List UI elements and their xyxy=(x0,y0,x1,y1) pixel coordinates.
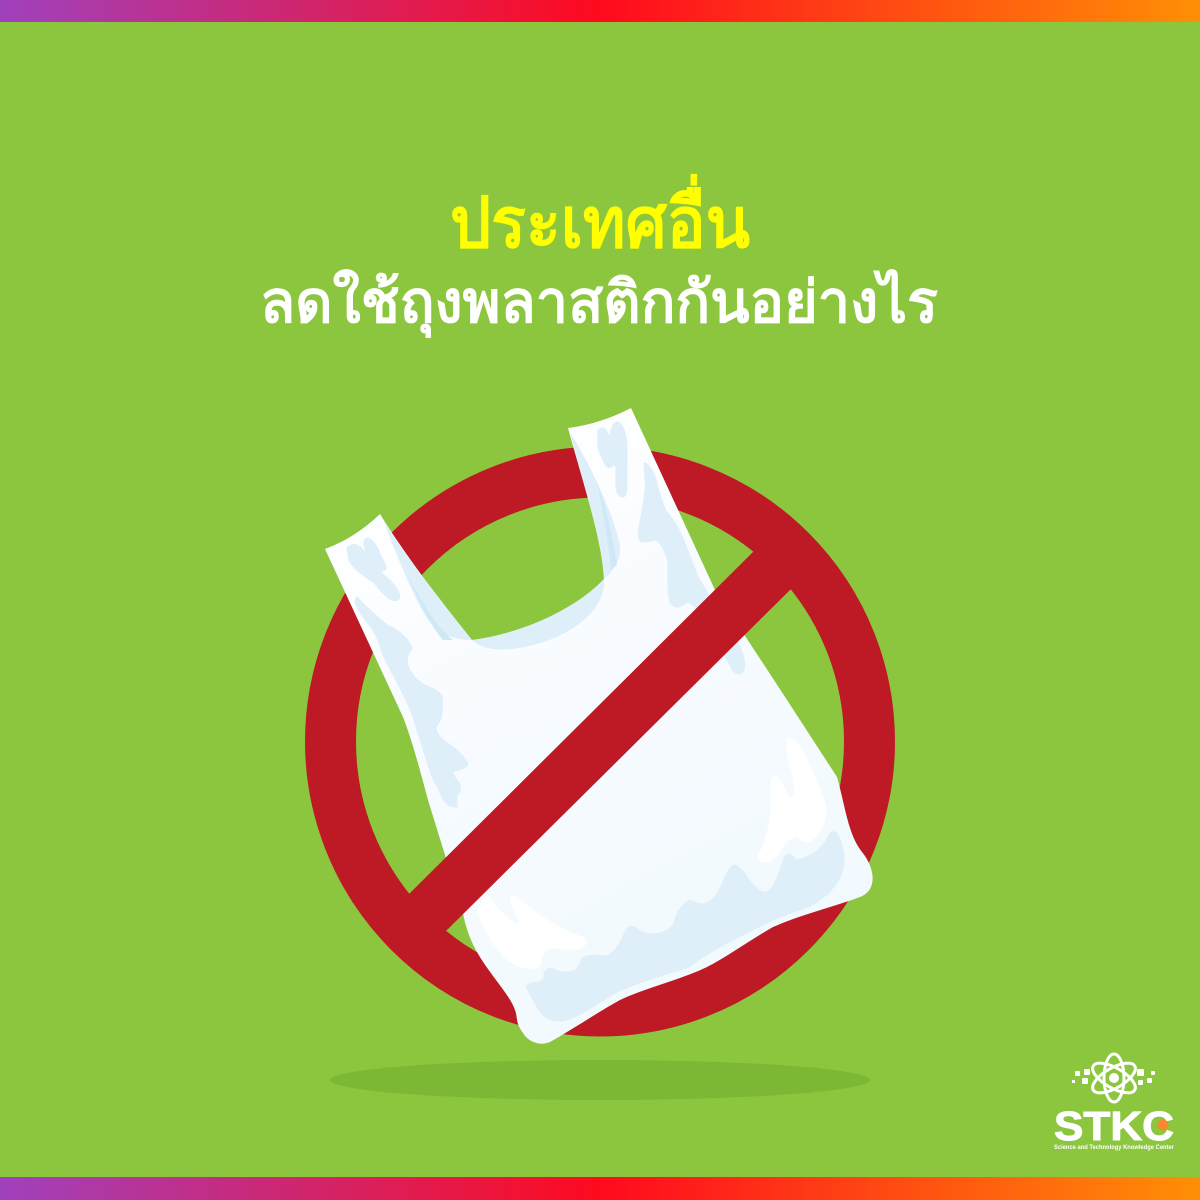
prohibition ring xyxy=(330,472,870,1011)
left handle fold xyxy=(383,520,472,640)
right edge patch xyxy=(639,464,744,673)
prohibition diagonal bar xyxy=(395,530,810,950)
title: ประเทศอื่น xyxy=(450,173,750,262)
ground shadow xyxy=(330,1060,870,1100)
logo tagline: Science and Technology Knowledge Center xyxy=(1054,1145,1175,1151)
top gradient bar xyxy=(0,0,1200,22)
STKC logo xyxy=(1054,1054,1175,1151)
bottom gradient bar xyxy=(0,1177,1200,1200)
bottom shade xyxy=(527,833,843,1020)
title xyxy=(260,173,938,339)
crescent under the opening xyxy=(472,579,604,649)
wordmark: STKC xyxy=(1054,1103,1174,1149)
title: ลดใช้ถุงพลาสติกกันอย่างไร xyxy=(260,268,938,339)
left handle blob xyxy=(348,539,399,600)
right highlight xyxy=(759,739,825,862)
fold patches xyxy=(348,423,843,1020)
bag body xyxy=(325,408,873,1044)
left highlight xyxy=(478,894,585,968)
orange dot xyxy=(1158,1120,1168,1130)
right handle blob xyxy=(599,423,626,496)
left edge patch xyxy=(356,598,467,806)
plastic bag xyxy=(325,408,873,1044)
right handle fold xyxy=(570,432,620,579)
highlights xyxy=(478,739,825,968)
emblem core and pixels xyxy=(1072,1069,1155,1085)
atom emblem xyxy=(1088,1054,1140,1102)
